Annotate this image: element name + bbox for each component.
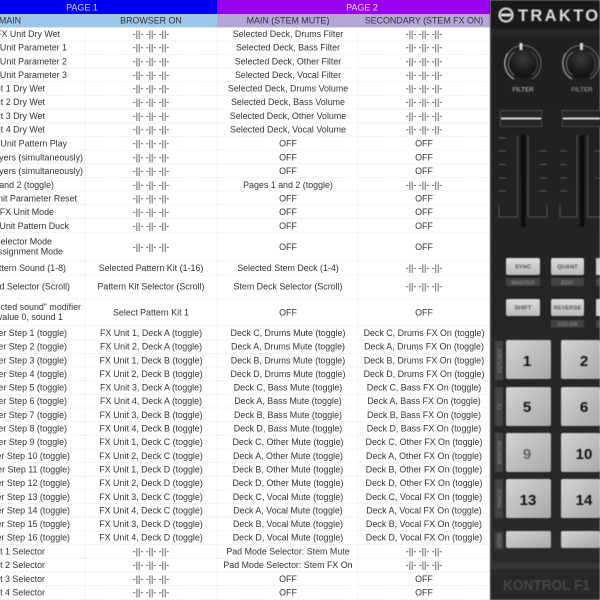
column 1: controls (cropped left): er Step 1 (toggle) <box>0 328 67 338</box>
pad 1 <box>506 340 551 379</box>
column 3: main (stem mute): OFF <box>279 574 297 584</box>
column 2: browser on: FX Unit 3, Deck A (toggle) <box>100 383 202 393</box>
pad 13 <box>506 479 551 518</box>
column 3: main (stem mute): OFF <box>279 307 297 317</box>
pad 1: 1 <box>523 353 531 370</box>
button: sync / master: SYNC <box>515 264 532 270</box>
column 2: browser on: FX Unit 3, Deck C (toggle) <box>99 492 203 502</box>
column 4: secondary (stem fx on): Deck A, Other FX On (toggle) <box>366 451 482 461</box>
column 4: secondary (stem fx on): OFF <box>415 207 433 217</box>
strip: punch <box>495 479 504 518</box>
page 2 header <box>217 0 490 14</box>
column 1: controls (cropped left): it 1 Dry Wet <box>0 84 46 94</box>
column 2: browser on: -||- -||- -||- <box>133 29 169 39</box>
column 2: browser on: -||- -||- -||- <box>133 588 169 598</box>
column 4: secondary (stem fx on): -||- -||- -||- <box>406 547 442 557</box>
pad 9: 9 <box>523 446 531 463</box>
button: reverse / color <box>551 299 584 328</box>
column 3: main (stem mute): Selected Deck, Other Volume <box>230 111 346 121</box>
column 4: secondary (stem fx on): OFF <box>415 221 433 231</box>
column 4: secondary (stem fx on): Deck A, Drums FX On (toggle) <box>364 342 484 352</box>
icon: Traktor logo <box>500 8 512 22</box>
column 4: secondary (stem fx on): Deck D, Bass FX On (toggle) <box>367 424 481 434</box>
column 4: secondary (stem fx on): Deck C, Bass FX On (toggle) <box>367 383 481 393</box>
column 2: browser on: -||- -||- -||- <box>133 152 169 162</box>
pad 10 <box>561 433 600 472</box>
column 4: secondary (stem fx on): -||- -||- -||- <box>406 43 442 53</box>
column 2: browser on: -||- -||- -||- <box>133 97 169 107</box>
column 3: main (stem mute): Selected Deck, Bass Filter <box>236 43 340 53</box>
column 1: controls (cropped left): Unit Parameter 1 <box>0 43 67 53</box>
column 2: browser on: -||- -||- -||- <box>133 166 169 176</box>
pad 9 <box>506 433 551 472</box>
button: cropped top right <box>596 258 600 286</box>
column 4: secondary (stem fx on): OFF <box>415 166 433 176</box>
column 2: browser on: FX Unit 4, Deck A (toggle) <box>100 396 202 406</box>
column 4: secondary (stem fx on): OFF <box>415 139 433 149</box>
column 3: main (stem mute): Deck B, Other Mute (toggle) <box>233 464 343 474</box>
column 4: secondary (stem fx on): OFF <box>415 194 433 204</box>
column 2: browser on: -||- -||- -||- <box>133 547 169 557</box>
column 3: main (stem mute): Pages 1 and 2 (toggle) <box>243 180 333 190</box>
pad blank left <box>506 531 551 548</box>
column 3: main (stem mute): Deck C, Drums Mute (toggle) <box>231 328 345 338</box>
panel: Kontrol F1 controller photo <box>490 0 600 600</box>
column 4: secondary (stem fx on): -||- -||- -||- <box>406 180 442 190</box>
column 1: controls (cropped left): er Step 9 (toggle) <box>0 437 67 447</box>
column 3: main (stem mute): Selected Deck, Drums Volume <box>228 84 348 94</box>
column 4: secondary (stem fx on): OFF <box>415 307 433 317</box>
column 2: browser on: FX Unit 2, Deck D (toggle) <box>99 478 203 488</box>
button: shift <box>506 299 540 316</box>
page 1 header: PAGE 1 <box>66 2 98 12</box>
model name band <box>491 563 600 600</box>
column headers: SECONDARY (STEM FX ON) <box>365 16 483 26</box>
column 1: controls (cropped left): er Step 7 (toggle) <box>0 410 67 420</box>
column 1: controls (cropped left): er Step 4 (toggle) <box>0 369 67 379</box>
fader 1 <box>499 110 547 227</box>
column 4: secondary (stem fx on): -||- -||- -||- <box>406 84 442 94</box>
column 3: main (stem mute): Deck A, Vocal Mute (toggle) <box>233 505 343 515</box>
column 2: browser on: -||- -||- -||- <box>133 180 169 190</box>
fader 2 <box>560 110 600 227</box>
column 3: main (stem mute): Deck A, Other Mute (toggle) <box>233 451 343 461</box>
column 2: browser on: FX Unit 1, Deck C (toggle) <box>99 437 203 447</box>
column 3: main (stem mute): Selected Deck, Other Filter <box>235 56 341 66</box>
column 2: browser on: Selected Pattern Kit (1-16) <box>99 263 203 273</box>
column 4: secondary (stem fx on): Deck B, Vocal FX On (toggle) <box>366 519 482 529</box>
button: quant / edit <box>551 258 584 286</box>
column 1: controls (cropped left) <box>0 29 83 598</box>
column 1: controls (cropped left): and 2 (toggle) <box>0 180 54 190</box>
column 4: secondary (stem fx on): -||- -||- -||- <box>406 560 442 570</box>
column 2: browser on: -||- -||- -||- <box>133 207 169 217</box>
page 1 header <box>0 0 217 14</box>
column 3: main (stem mute): OFF <box>279 207 297 217</box>
column 2: browser on: FX Unit 1, Deck D (toggle) <box>99 464 203 474</box>
column 3: main (stem mute): Deck D, Drums Mute (toggle) <box>231 369 345 379</box>
column 4: secondary (stem fx on): -||- -||- -||- <box>406 97 442 107</box>
column 2: browser on: -||- -||- -||- <box>133 139 169 149</box>
column 4: secondary (stem fx on): Deck B, Drums FX On (toggle) <box>364 355 484 365</box>
knob: filter 2: FILTER <box>571 86 593 94</box>
column 1: controls (cropped left): Unit Pattern Play <box>0 139 68 149</box>
column 1: controls (cropped left): er Step 3 (toggle) <box>0 355 67 365</box>
column 1: controls (cropped left): Unit Parameter 2 <box>0 56 67 66</box>
column 2: browser on: FX Unit 2, Deck C (toggle) <box>99 451 203 461</box>
column 3: main (stem mute): Deck D, Vocal Mute (toggle) <box>233 533 343 543</box>
pad blank right <box>561 531 600 548</box>
column 4: secondary (stem fx on): Deck D, Drums FX On (toggle) <box>364 369 484 379</box>
column 2: browser on: FX Unit 2, Deck B (toggle) <box>99 369 203 379</box>
pad 2 <box>561 340 600 379</box>
column headers <box>0 14 490 27</box>
column 2: browser on: FX Unit 4, Deck C (toggle) <box>99 505 203 515</box>
strip: fx <box>495 387 504 426</box>
strip: stop: STOP <box>498 533 504 547</box>
column 3: main (stem mute): OFF <box>279 242 297 252</box>
column 1: controls (cropped left): it 4 Dry Wet <box>0 124 46 134</box>
column 4: secondary (stem fx on): Deck D, Vocal FX On (toggle) <box>366 533 482 543</box>
column 2: browser on: -||- -||- -||- <box>133 194 169 204</box>
knob: filter 1 <box>505 43 541 94</box>
strip: monitor: MONITOR <box>498 440 504 464</box>
column 2: browser on: -||- -||- -||- <box>133 560 169 570</box>
column 3: main (stem mute): Deck C, Bass Mute (toggle) <box>234 383 342 393</box>
column 1: controls (cropped left): it 2 Dry Wet <box>0 97 46 107</box>
column 3: main (stem mute): Pad Mode Selector: Stem FX On <box>223 560 353 570</box>
button: quant / edit: QUANT <box>557 264 578 270</box>
pad 6 <box>561 387 600 426</box>
model name band: KONTROL F1 <box>503 578 590 594</box>
column 4: secondary (stem fx on): Deck C, Vocal FX On (toggle) <box>366 492 482 502</box>
column 3: main (stem mute): OFF <box>279 139 297 149</box>
column 2: browser on: -||- -||- -||- <box>133 84 169 94</box>
column 4: secondary (stem fx on): OFF <box>415 152 433 162</box>
column 3: main (stem mute): Stem Deck Selector (Scroll) <box>234 282 343 292</box>
column 2: browser on: -||- -||- -||- <box>133 124 169 134</box>
column 3: main (stem mute): Selected Stem Deck (1-4) <box>237 263 339 273</box>
column 2: browser on: FX Unit 2, Deck A (toggle) <box>100 342 202 352</box>
column 2: browser on: Pattern Kit Selector (Scroll) <box>97 282 205 292</box>
pad 10: 10 <box>576 446 592 463</box>
column 3: main (stem mute): Deck A, Bass Mute (toggle) <box>234 396 342 406</box>
column 2: browser on: -||- -||- -||- <box>133 221 169 231</box>
column 3: main (stem mute): Deck A, Drums Mute (toggle) <box>231 342 345 352</box>
strip: fx: FX <box>498 403 504 410</box>
column 4: secondary (stem fx on): Deck B, Other FX On (toggle) <box>366 464 482 474</box>
pad 2: 2 <box>580 353 588 370</box>
column 1: controls (cropped left): Unit Pattern Duck <box>0 221 70 231</box>
column 1: controls (cropped left): d Selector (Scroll) <box>0 282 70 292</box>
pad 14: 14 <box>576 492 593 509</box>
column headers: BROWSER ON <box>120 16 182 26</box>
strip: monitor <box>495 433 504 472</box>
column 3: main (stem mute) <box>223 29 353 598</box>
button: reverse / color: REVERSE <box>554 306 581 312</box>
column 4: secondary (stem fx on): OFF <box>415 588 433 598</box>
button: reverse / color: COLOR <box>558 322 577 328</box>
column 3: main (stem mute): Deck C, Other Mute (toggle) <box>233 437 344 447</box>
column 3: main (stem mute): OFF <box>279 152 297 162</box>
column 1: controls (cropped left): nit Parameter Reset <box>0 194 78 204</box>
column 2: browser on: -||- -||- -||- <box>133 70 169 80</box>
column 4: secondary (stem fx on): -||- -||- -||- <box>406 282 442 292</box>
column 3: main (stem mute): Selected Deck, Drums Filter <box>233 29 343 39</box>
column 3: main (stem mute): Deck D, Other Mute (toggle) <box>233 478 344 488</box>
column 1: controls (cropped left): er Step 6 (toggle) <box>0 396 67 406</box>
button: cropped second right <box>596 299 600 328</box>
column 2: browser on: FX Unit 3, Deck B (toggle) <box>99 410 203 420</box>
column 3: main (stem mute): OFF <box>279 194 297 204</box>
button: quant / edit: EDIT <box>561 280 574 286</box>
knob: filter 1: FILTER <box>512 86 534 94</box>
column 4: secondary (stem fx on): -||- -||- -||- <box>406 263 442 273</box>
button: sync / master <box>506 258 540 286</box>
pad 5 <box>506 387 551 426</box>
column 2: browser on: -||- -||- -||- <box>133 111 169 121</box>
column 3: main (stem mute): Deck B, Vocal Mute (toggle) <box>233 519 343 529</box>
column 4: secondary (stem fx on): OFF <box>415 242 433 252</box>
column 3: main (stem mute): Deck C, Vocal Mute (toggle) <box>233 492 343 502</box>
column 4: secondary (stem fx on): Deck A, Bass FX On (toggle) <box>367 396 481 406</box>
column 1: controls (cropped left): FX Unit Mode <box>0 207 54 217</box>
column 4: secondary (stem fx on): -||- -||- -||- <box>406 29 442 39</box>
pad 6: 6 <box>580 399 588 416</box>
strip: keylock: KEYLOCK <box>498 348 504 373</box>
column 1: controls (cropped left): it 3 Dry Wet <box>0 111 46 121</box>
column 4: secondary (stem fx on): Deck B, Bass FX On (toggle) <box>367 410 481 420</box>
knob: filter 2 <box>563 43 599 94</box>
strip: keylock <box>495 341 504 380</box>
column 4: secondary (stem fx on): Deck C, Drums FX On (toggle) <box>364 328 484 338</box>
column 1: controls (cropped left): er Step 5 (toggle) <box>0 383 67 393</box>
column 2: browser on: FX Unit 4, Deck B (toggle) <box>99 424 203 434</box>
strip: stop <box>495 532 504 549</box>
column 4: secondary (stem fx on): -||- -||- -||- <box>406 124 442 134</box>
button: sync / master: MASTER <box>511 280 535 286</box>
column 4: secondary (stem fx on) <box>364 29 484 598</box>
column 2: browser on <box>97 29 205 598</box>
column 2: browser on: -||- -||- -||- <box>133 242 169 252</box>
column 2: browser on: FX Unit 1, Deck B (toggle) <box>99 355 203 365</box>
column 3: main (stem mute): OFF <box>279 588 297 598</box>
column 2: browser on: Select Pattern Kit 1 <box>113 307 189 317</box>
column 1: controls (cropped left): ttern Sound (1-8) <box>0 263 66 273</box>
column 3: main (stem mute): OFF <box>279 221 297 231</box>
column 3: main (stem mute): Pad Mode Selector: Stem Mute <box>226 547 350 557</box>
column 4: secondary (stem fx on): Deck C, Other FX On (toggle) <box>366 437 482 447</box>
pad 14 <box>561 479 600 518</box>
column headers: MAIN (STEM MUTE) <box>247 16 329 26</box>
column 3: main (stem mute): Deck B, Drums Mute (toggle) <box>231 355 345 365</box>
column 1: controls (cropped left): Unit Parameter 3 <box>0 70 67 80</box>
column 4: secondary (stem fx on): -||- -||- -||- <box>406 111 442 121</box>
strip: punch: PUNCH <box>498 489 504 507</box>
column 3: main (stem mute): Deck D, Bass Mute (toggle) <box>234 424 342 434</box>
column 1: controls (cropped left): er Step 8 (toggle) <box>0 424 67 434</box>
column 2: browser on: FX Unit 3, Deck D (toggle) <box>99 519 203 529</box>
column 2: browser on: -||- -||- -||- <box>133 574 169 584</box>
column 3: main (stem mute): Selected Deck, Vocal Volume <box>230 124 346 134</box>
column 2: browser on: -||- -||- -||- <box>133 43 169 53</box>
column 4: secondary (stem fx on): -||- -||- -||- <box>406 56 442 66</box>
column 3: main (stem mute): Deck B, Bass Mute (toggle) <box>234 410 342 420</box>
column 4: secondary (stem fx on): -||- -||- -||- <box>406 70 442 80</box>
column 4: secondary (stem fx on): Deck D, Other FX On (toggle) <box>366 478 482 488</box>
column 2: browser on: FX Unit 1, Deck A (toggle) <box>100 328 202 338</box>
column 1: controls (cropped left): er Step 2 (toggle) <box>0 342 67 352</box>
column 3: main (stem mute): Selected Deck, Bass Volume <box>231 97 345 107</box>
column 4: secondary (stem fx on): Deck A, Vocal FX On (toggle) <box>366 505 482 515</box>
column 3: main (stem mute): Selected Deck, Vocal Filter <box>235 70 341 80</box>
column 2: browser on: FX Unit 4, Deck D (toggle) <box>99 533 203 543</box>
pad 13: 13 <box>520 492 536 509</box>
page 2 header: PAGE 2 <box>346 2 378 12</box>
column 3: main (stem mute): OFF <box>279 166 297 176</box>
column 4: secondary (stem fx on): OFF <box>415 574 433 584</box>
column 2: browser on: -||- -||- -||- <box>133 56 169 66</box>
button: shift: SHIFT <box>515 306 532 312</box>
pad 5: 5 <box>523 399 531 416</box>
